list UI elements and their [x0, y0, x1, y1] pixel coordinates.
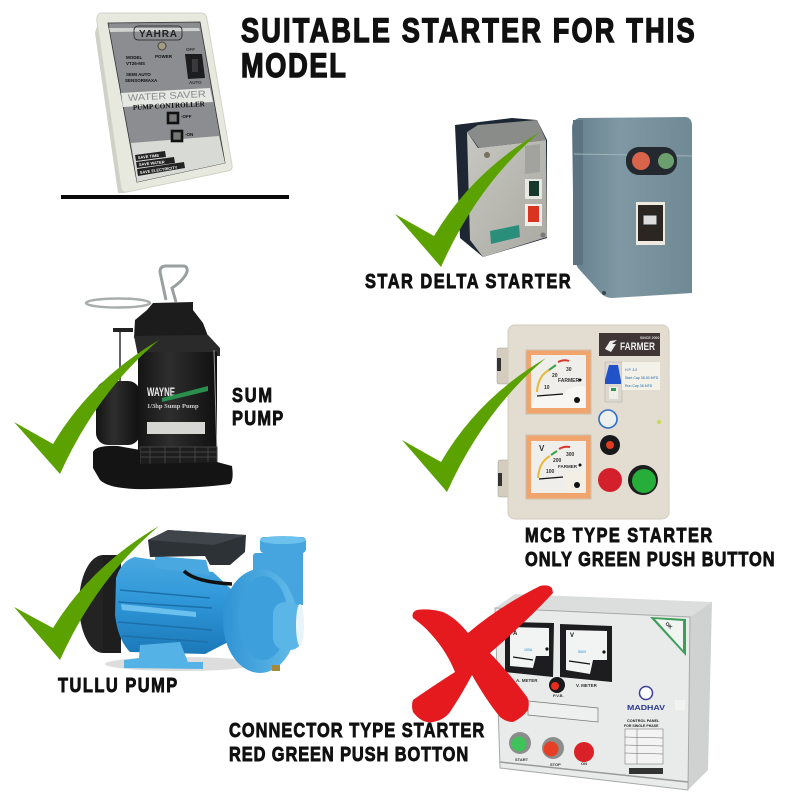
water saver pump controller device: WATER SAVER	[128, 89, 206, 104]
farmer plate: FARMER	[620, 341, 655, 353]
water saver pump controller device: SENSORMAXA	[125, 78, 158, 83]
start button: START	[515, 757, 529, 762]
tested stamp	[599, 410, 617, 428]
start button	[509, 732, 531, 762]
label: tullu pump: TULLU PUMP	[58, 673, 177, 696]
water saver pump controller device: SAVE WATER	[139, 159, 165, 167]
shadow	[105, 657, 255, 671]
junction box	[155, 556, 210, 575]
instruction note	[528, 701, 598, 722]
title	[241, 11, 695, 85]
bottom voltmeter: V	[539, 444, 545, 453]
door latch	[675, 700, 685, 710]
sump pump	[86, 266, 233, 489]
water saver pump controller device: YAHRA	[139, 29, 177, 40]
water saver pump controller device: -ON	[185, 132, 193, 137]
water saver pump controller device: AUTO	[189, 80, 202, 85]
bottom voltmeter: 200	[553, 458, 562, 464]
water saver pump controller device: MODEL	[126, 55, 142, 60]
label: star delta starter: STAR DELTA STARTER	[365, 269, 571, 292]
water saver pump controller device: VT25-MS	[126, 61, 145, 66]
connector type starter panel: P.V.B.	[553, 693, 564, 698]
a meter: 100A	[524, 648, 533, 652]
top and side of cabinet	[495, 594, 712, 617]
hinges	[497, 348, 509, 384]
top ammeter: 30	[566, 367, 572, 373]
front face	[495, 608, 690, 790]
mcb switch	[605, 362, 622, 402]
label: connector type starter: CONNECTOR TYPE STARTER	[229, 718, 485, 741]
check mark: mcb	[402, 358, 546, 492]
top ammeter: 10	[544, 385, 550, 391]
bottom voltmeter: 100	[546, 469, 555, 475]
red cross mark	[412, 585, 553, 722]
white band	[121, 88, 213, 107]
terminal strip	[629, 768, 663, 774]
a meter: A. METER	[516, 678, 538, 683]
enclosure	[508, 325, 669, 519]
v meter: V. METER	[576, 683, 598, 688]
outlet nozzles	[253, 537, 306, 605]
power cable	[184, 571, 232, 584]
on lamp	[574, 742, 594, 766]
check mark: sum pump	[14, 340, 159, 474]
label: mcb type starter	[525, 523, 775, 570]
star delta starter: large grey-blue box	[572, 117, 692, 298]
handle	[160, 266, 187, 302]
pvb button	[549, 677, 565, 693]
wayne label: WAYNE	[147, 385, 175, 399]
label: sum pump	[232, 383, 283, 429]
motor base	[124, 642, 203, 669]
label: mcb type starter: MCB TYPE STARTER	[525, 523, 713, 546]
bottom voltmeter: FARMER	[558, 464, 578, 469]
label: sum pump: PUMP	[232, 406, 283, 429]
check mark: star delta	[395, 132, 540, 267]
label: connector type starter: RED GREEN PUSH BOTTON	[229, 742, 468, 765]
ok tested badge	[650, 617, 686, 656]
red and green buttons	[626, 147, 677, 175]
rating label: Run Cap 36 MFD	[625, 384, 653, 388]
title: SUITABLE STARTER FOR THIS	[241, 11, 695, 50]
black rear cover	[79, 555, 127, 653]
mcb type starter panel	[497, 325, 669, 519]
label: mcb type starter: ONLY GREEN PUSH BUTTON	[525, 547, 775, 570]
top ammeter: FARMER	[558, 378, 580, 384]
stop button	[542, 737, 564, 767]
v meter: 500V	[578, 650, 587, 654]
red lamp	[598, 468, 622, 492]
madhav logo	[624, 686, 665, 728]
a meter	[505, 622, 554, 683]
connector type starter panel	[495, 594, 712, 790]
strainer mesh	[140, 447, 217, 465]
green push button	[628, 465, 658, 495]
top ammeter: 20	[552, 373, 558, 379]
rating label	[622, 362, 660, 390]
bottom voltmeter: 300	[566, 452, 575, 458]
water saver pump controller device: SAVE TIME	[138, 153, 160, 160]
inlet	[273, 602, 302, 650]
reset push button	[600, 435, 620, 455]
sump pump: 1/3hp Sump Pump	[147, 403, 199, 410]
bottom voltmeter	[526, 435, 591, 499]
stop button: STOP	[550, 762, 561, 767]
water saver pump controller device: PUMP CONTROLLER	[133, 99, 206, 112]
head	[134, 302, 208, 338]
v meter	[560, 624, 612, 688]
water saver pump controller device: OFF	[186, 47, 195, 52]
rating label: H.P. 3.0	[625, 368, 637, 372]
float	[96, 381, 140, 445]
motor body	[115, 557, 232, 654]
ok tested badge: OK	[664, 621, 673, 631]
water saver pump controller device: POWER	[155, 54, 173, 59]
spec table	[625, 729, 663, 764]
motor	[138, 352, 217, 452]
a meter: A	[513, 631, 518, 637]
water saver pump controller device: -OFF	[181, 114, 192, 119]
divider under controller	[61, 195, 289, 199]
label: sum pump: SUM	[232, 383, 272, 406]
water saver pump controller device: SEMI AUTO	[126, 72, 151, 77]
top ammeter	[526, 350, 591, 414]
water saver pump controller device: SAVE ELECTRICITY	[139, 165, 178, 175]
farmer plate	[599, 333, 660, 356]
rating label: Start Cap 36-50 MFD	[625, 376, 659, 380]
tullu pump	[79, 530, 306, 673]
madhav logo: FOR SINGLE PHASE	[624, 724, 659, 728]
float ring	[86, 298, 150, 308]
madhav logo: CONTROL PANEL	[627, 719, 660, 723]
farmer plate: SINCE 2000	[640, 336, 660, 340]
madhav logo: MADHAV	[627, 703, 665, 712]
on lamp: ON	[581, 761, 587, 766]
indicator led	[657, 420, 661, 424]
check mark: tullu pump	[14, 526, 159, 660]
pump volute	[223, 569, 297, 673]
drain plug	[272, 665, 280, 671]
v meter: V	[570, 633, 574, 639]
title: MODEL	[241, 46, 346, 85]
base	[93, 446, 233, 489]
star delta starter: small box	[455, 118, 547, 257]
label: connector type starter	[229, 718, 485, 765]
water saver pump controller device	[95, 13, 232, 193]
